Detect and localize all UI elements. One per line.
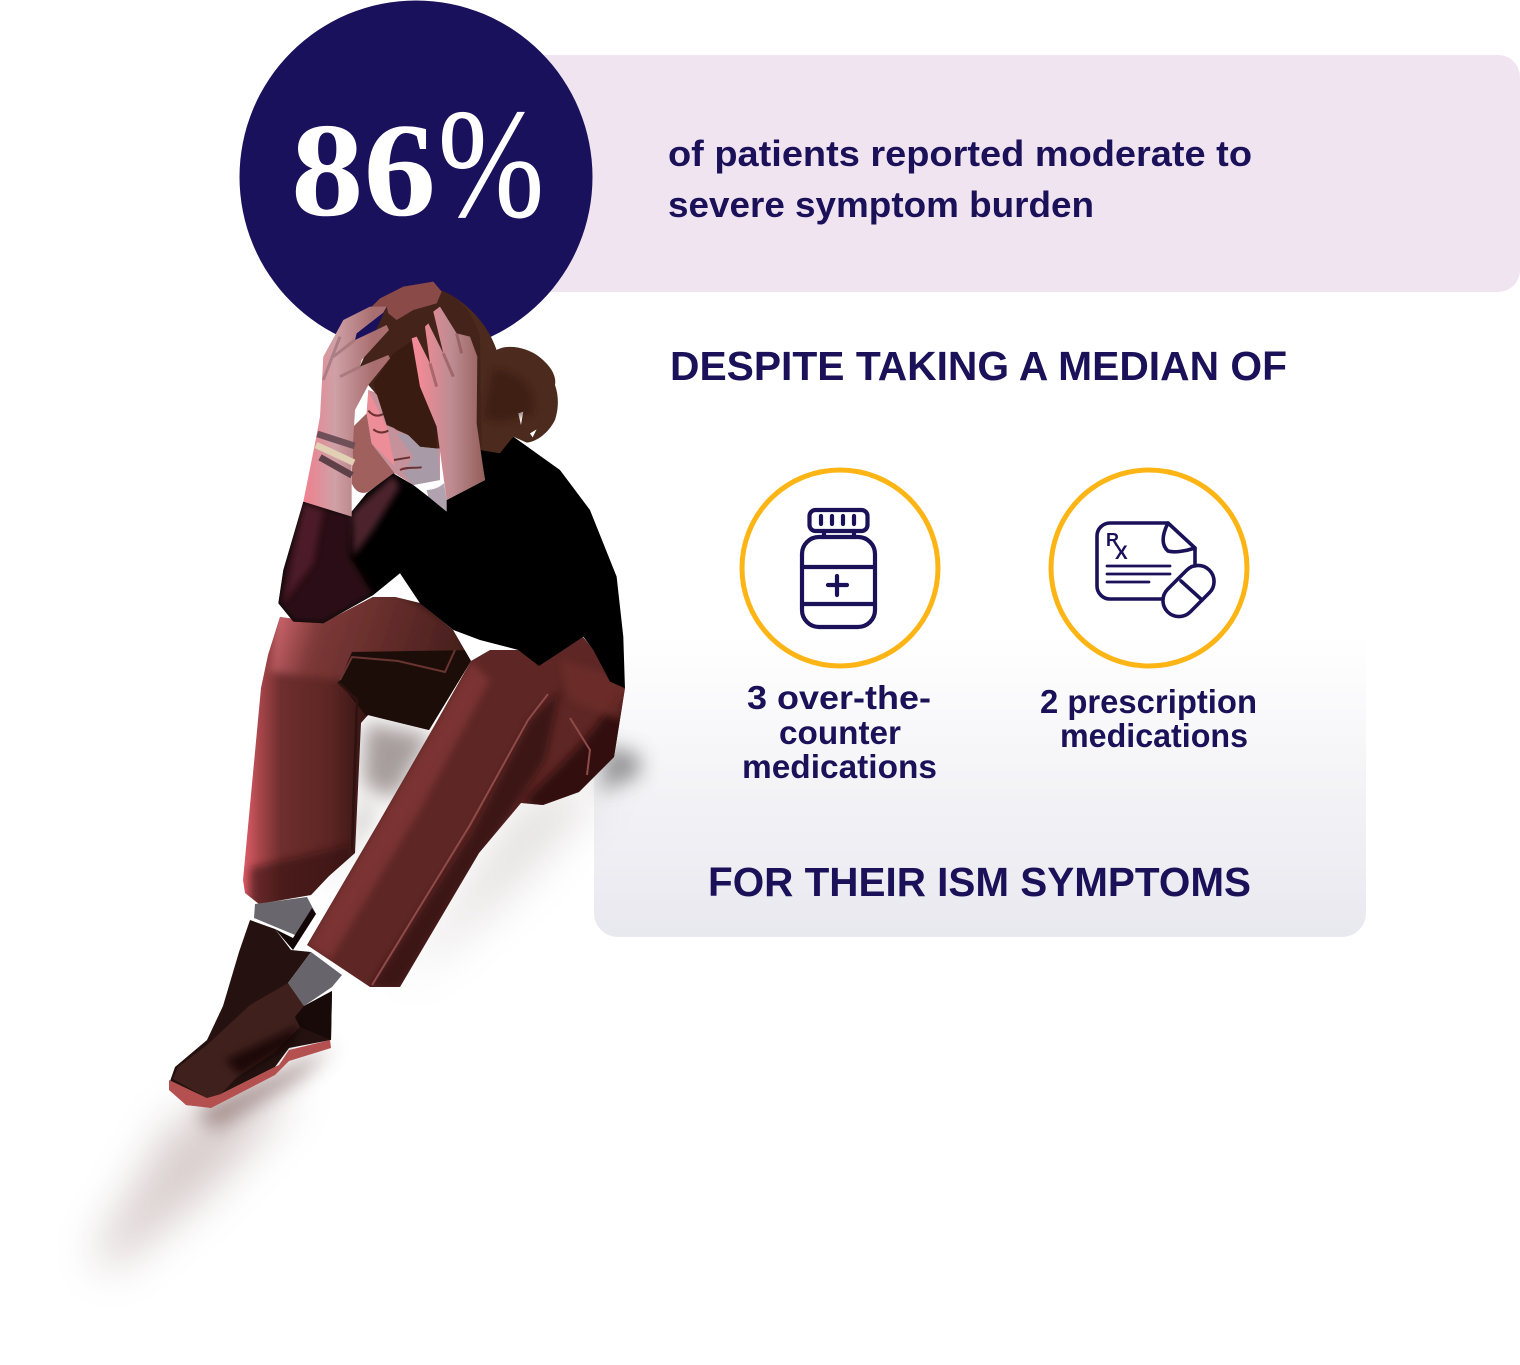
neck (427, 483, 447, 512)
hair mass (358, 290, 482, 450)
label: over-the-counter (742, 680, 937, 786)
panel: symptom burden (500, 55, 1520, 292)
heading: for their ISM symptoms: FOR THEIR ISM SYMPTOMS (708, 859, 1251, 905)
left hand finger shadows (323, 337, 360, 380)
shoe (169, 908, 332, 1108)
text: symptom burden statement (668, 133, 1252, 225)
text: symptom burden statement: of patients reported moderate to (668, 133, 1252, 174)
icon: prescription and pill (1051, 470, 1247, 666)
icon: prescription and pill: R (1106, 530, 1119, 550)
face shadow (352, 413, 395, 493)
near leg trousers (300, 630, 630, 990)
label: over-the-counter: medications (742, 749, 937, 786)
heading: despite taking: DESPITE TAKING A MEDIAN OF (670, 343, 1287, 389)
sock: front (288, 952, 342, 1006)
hair shading (483, 370, 534, 421)
left hand and forearm (303, 307, 390, 517)
label: over-the-counter: 3 over-the- (747, 680, 931, 717)
icon: prescription and pill: X (1115, 543, 1128, 564)
face (367, 390, 440, 485)
stat: 86%: % (438, 77, 544, 250)
sleeve and chest highlight (278, 475, 400, 623)
scalp highlight (368, 282, 442, 320)
label: prescription: 2 prescription (1040, 684, 1257, 721)
eyes, nose and mouth (368, 411, 422, 470)
illustration: seated woman holding her head (95, 282, 640, 1270)
text: symptom burden statement: severe symptom burden (668, 184, 1094, 225)
icon: medicine bottle (742, 470, 938, 666)
label: prescription: medications (1060, 718, 1248, 755)
head and upper body, drawn in a 3x local coordinate system (278, 282, 625, 688)
right hand finger shadows (430, 333, 462, 387)
ground shadows (95, 722, 640, 1270)
stat: 86% (291, 77, 544, 250)
stat circle (240, 0, 592, 354)
bun gaps (518, 412, 537, 437)
sweater (278, 437, 625, 688)
far leg trousers (243, 597, 471, 904)
panel: medications (594, 560, 1366, 937)
sock: back (254, 897, 316, 935)
right hand and forearm (412, 307, 485, 500)
label: prescription (1040, 684, 1257, 755)
hair bun (440, 290, 558, 455)
bracelets (316, 434, 355, 475)
stat: 86%: 86 (291, 96, 436, 244)
label: over-the-counter: counter (779, 715, 901, 752)
